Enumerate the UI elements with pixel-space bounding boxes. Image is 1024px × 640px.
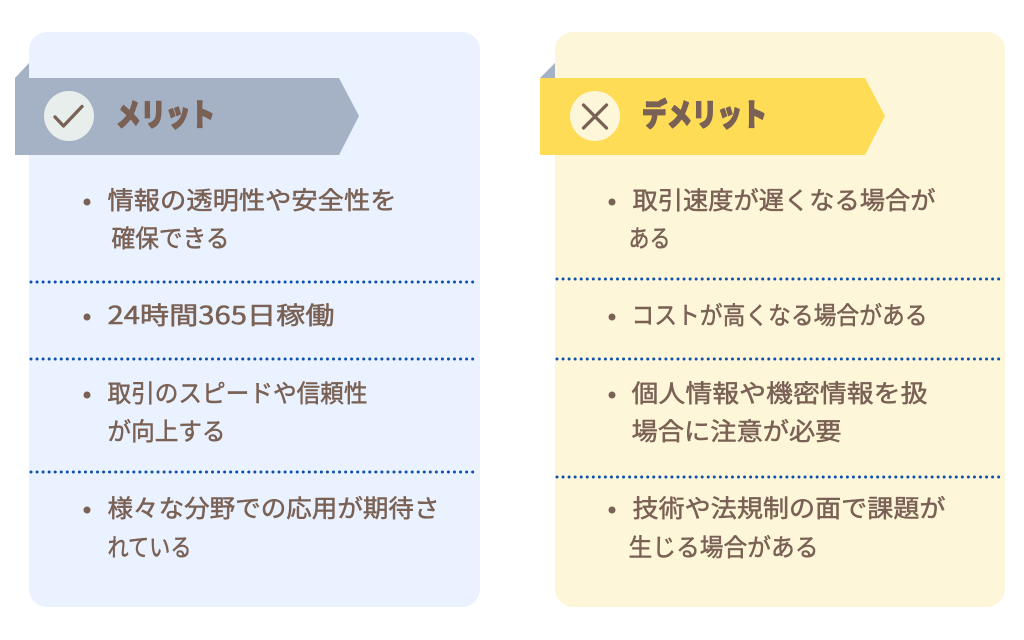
list item: speed and trust: が向上する [108,413,226,448]
icon: cross mark [570,91,620,141]
heading: demerits: デメリット [642,90,767,135]
list item: technical and legal issues: 技術や法規制の面で課題が [632,490,946,525]
icon: check mark [44,91,94,141]
list item: applications [84,490,440,564]
list item: security [84,182,396,255]
list item: slow transactions [608,182,936,255]
list item: higher cost: コストが高くなる場合がある [632,297,928,332]
list item: speed and trust: 取引のスピードや信頼性 [108,375,368,410]
heading: merits: メリット [116,90,215,135]
panel: merits [15,32,480,607]
list item: personal data: 個人情報や機密情報を扱 [632,375,928,410]
list item: slow transactions: ある [628,220,670,255]
list item: applications: 様々な分野での応用が期待さ [108,490,440,525]
list item: applications: れている [108,529,192,564]
list item: security: 確保できる [112,220,230,255]
list item: technical and legal issues [608,490,946,564]
list item: technical and legal issues: 生じる場合がある [628,529,818,564]
header ribbon: merits [15,63,359,155]
list item: security: 情報の透明性や安全性を [108,182,396,217]
list item: personal data: 場合に注意が必要 [632,413,842,448]
list item: speed and trust [84,375,368,448]
list item: slow transactions: 取引速度が遅くなる場合が [632,182,936,217]
list item: personal data [608,375,928,448]
panel: demerits [540,32,1005,607]
header ribbon: demerits [540,63,885,155]
list item: always on: 24時間365日稼働 [108,297,334,332]
